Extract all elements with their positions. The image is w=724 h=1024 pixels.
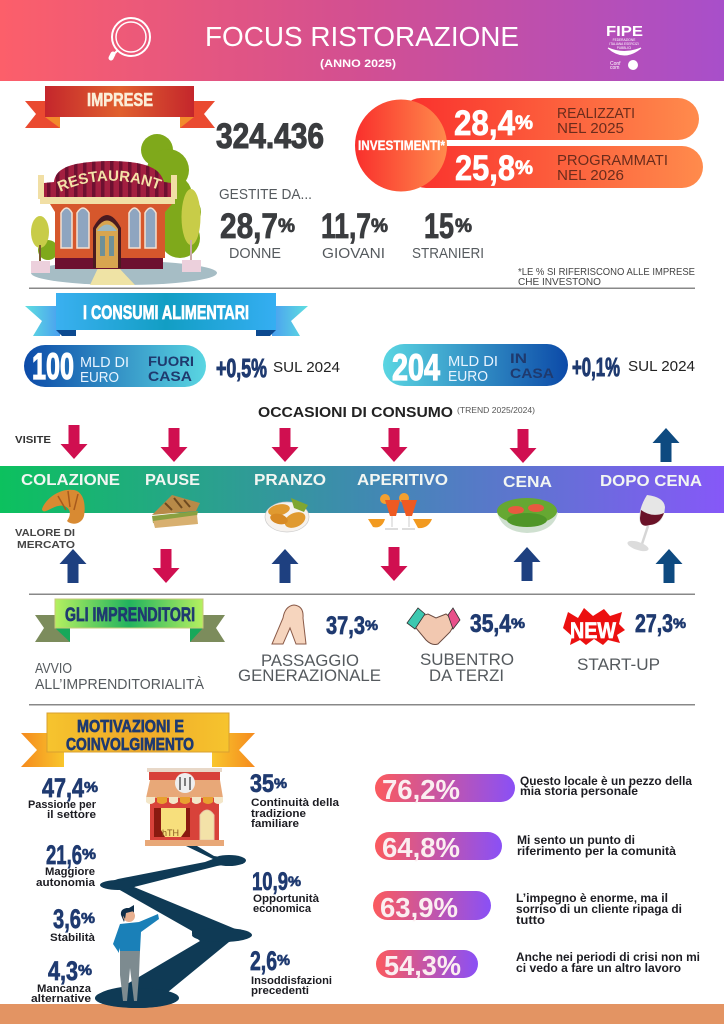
stat: continuita tradizione familiare: Continuità della	[251, 797, 340, 809]
statement: periodi di crisi	[376, 950, 700, 981]
stat: start-up: 27,3	[635, 610, 673, 638]
band: meal occasions	[0, 466, 724, 513]
arrows: valore di mercato	[60, 547, 682, 583]
pill: programmati	[405, 146, 703, 188]
label: visite: VISITE	[15, 435, 51, 446]
stat: stabilita: 3,6	[53, 904, 81, 934]
stat: mancanza alternative: %	[78, 962, 92, 979]
stat: start-up: %	[673, 615, 687, 631]
pill: realizzati: %	[515, 113, 533, 134]
stat: subentro da terzi: 35,4	[470, 610, 511, 638]
stat: opportunita economica: economica	[253, 903, 312, 915]
stat: mancanza alternative: Mancanza	[37, 983, 92, 995]
heading: occasioni di consumo	[258, 405, 535, 421]
stat: donne: DONNE	[229, 245, 281, 262]
pill: 204 mld in casa	[383, 344, 568, 388]
stat: start-up: START-UP	[577, 655, 660, 674]
statement: impegno enorme: 63,9%	[380, 892, 458, 923]
stat: mancanza alternative	[31, 956, 92, 1005]
pill: 204 mld in casa: EURO	[448, 368, 488, 385]
pill: realizzati: REALIZZATI	[557, 106, 635, 122]
trend: +0,1%: SUL 2024	[628, 358, 695, 375]
trend: +0,5%	[216, 353, 340, 383]
icon: aperitivo glasses	[368, 493, 432, 529]
stat: stranieri: %	[455, 216, 472, 237]
stat: start-up	[563, 608, 687, 674]
statement: storia personale: mia storia personale	[520, 784, 638, 798]
subtitle: (ANNO 2025)	[320, 58, 396, 70]
stat: continuita tradizione familiare: 35	[250, 770, 274, 798]
arrows: visite	[60, 425, 680, 463]
pill: programmati: NEL 2026	[557, 168, 624, 184]
stat: insoddisfazioni precedenti: Insoddisfazioni	[251, 975, 332, 987]
band: meal occasions: COLAZIONE	[21, 472, 120, 489]
stat: opportunita economica	[252, 868, 320, 915]
stat: continuita tradizione familiare: tradizione	[251, 808, 306, 820]
stat: subentro da terzi	[407, 608, 526, 685]
text: gestite da: GESTITE DA...	[219, 186, 312, 203]
statement: storia personale: Questo locale è un pezzo della	[520, 774, 692, 788]
stat: passione per il settore	[28, 773, 98, 821]
stat: giovani: GIOVANI	[322, 245, 385, 262]
stat: passaggio generazionale	[238, 605, 381, 685]
stat: stranieri: STRANIERI	[412, 245, 484, 262]
stat: opportunita economica: 10,9	[252, 868, 288, 896]
ribbon heading: gli imprenditori	[35, 599, 225, 642]
stat: continuita tradizione familiare: %	[274, 775, 288, 791]
statement: periodi di crisi: ci vedo a fare un altro lavoro	[516, 961, 681, 975]
statement: impegno enorme	[373, 891, 682, 927]
stat: giovani: 11,7	[321, 207, 371, 246]
pill: programmati: 25,8	[455, 149, 515, 188]
band: meal occasions: PAUSE	[145, 472, 200, 489]
logo: FIPE: FIPE	[606, 23, 643, 40]
logo: FIPE: com	[610, 65, 619, 71]
text: avvio all'imprenditorialita: AVVIO	[35, 660, 72, 677]
band: meal occasions: CENA	[503, 474, 552, 491]
ribbon heading: motivazioni e coinvolgimento: COINVOLGIMENTO	[66, 734, 194, 754]
pill: 100 mld fuori casa: EURO	[80, 369, 119, 386]
statement: storia personale: 76,2%	[382, 774, 460, 805]
logo: FIPE: PUBBLICI	[617, 46, 631, 50]
stat: maggiore autonomia: autonomia	[36, 877, 96, 889]
icon: new burst: NEW	[570, 618, 616, 643]
label: valore di mercato: VALORE DI	[15, 528, 75, 539]
stat: passione per il settore: %	[84, 779, 98, 796]
footer band	[0, 1004, 724, 1024]
footnote: CHE INVESTONO	[518, 276, 601, 288]
label: valore di mercato: MERCATO	[17, 540, 75, 551]
stat: subentro da terzi: %	[511, 615, 526, 631]
pill: 100 mld fuori casa: 100	[32, 346, 74, 387]
trend: +0,1%: +0,1%	[572, 352, 620, 382]
illustration: shop	[145, 768, 224, 846]
ribbon heading: i consumi alimentari	[25, 293, 308, 336]
stat: mancanza alternative: alternative	[31, 993, 91, 1005]
icon: handshake	[407, 608, 460, 644]
statement: punto di riferimento: 64,8%	[382, 832, 460, 863]
pill: programmati: %	[515, 158, 533, 179]
circle: investimenti label	[355, 100, 447, 192]
heading: occasioni di consumo: OCCASIONI DI CONSUMO	[258, 405, 453, 421]
heading: occasioni di consumo: (TREND 2025/2024)	[457, 406, 535, 415]
stat: insoddisfazioni precedenti: %	[277, 952, 290, 969]
stat: continuita tradizione familiare	[250, 770, 340, 830]
ribbon heading: i consumi alimentari: I CONSUMI ALIMENTARI	[83, 303, 249, 324]
stat: stabilita: %	[81, 910, 95, 927]
ribbon heading: imprese	[25, 86, 215, 128]
stat: stranieri	[412, 207, 484, 262]
icon: croissant	[42, 490, 85, 524]
illustration: restaurant: RESTAURANT	[57, 170, 162, 192]
pill: 204 mld in casa: CASA	[510, 365, 554, 381]
stat: passaggio generazionale: %	[365, 617, 379, 633]
label: valore di mercato	[15, 528, 75, 551]
logo: FIPE: FEDERAZIONE	[613, 38, 635, 42]
header band	[0, 0, 724, 81]
pill: 204 mld in casa: 204	[392, 347, 440, 388]
icon: clasped arms	[272, 605, 306, 644]
pill: programmati: PROGRAMMATI	[557, 153, 668, 169]
stat: opportunita economica: %	[288, 873, 302, 889]
statement: impegno enorme: sorriso di un cliente ripaga di	[516, 902, 682, 916]
circle: investimenti label: INVESTIMENTI*	[358, 137, 445, 153]
stat: mancanza alternative: 4,3	[48, 956, 78, 986]
stat: passaggio generazionale: GENERAZIONALE	[238, 666, 381, 685]
stat: passaggio generazionale: PASSAGGIO	[261, 651, 359, 670]
footnote	[518, 266, 695, 288]
statement: punto di riferimento: Mi sento un punto di	[517, 833, 635, 847]
band: meal occasions: DOPO CENA	[600, 473, 702, 490]
trend: +0,5%: SUL 2024	[273, 359, 340, 376]
pill: 100 mld fuori casa: FUORI	[148, 353, 194, 369]
stat: stabilita	[50, 904, 96, 944]
statement: punto di riferimento	[375, 832, 676, 863]
band: meal occasions: PRANZO	[254, 472, 326, 489]
stat: passione per il settore: 47,4	[42, 773, 84, 803]
stat: donne: 28,7	[220, 207, 278, 246]
stat: insoddisfazioni precedenti: 2,6	[250, 946, 277, 976]
stat: maggiore autonomia: %	[82, 846, 96, 863]
stat: stabilita: Stabilità	[50, 932, 96, 944]
stat: subentro da terzi: DA TERZI	[429, 666, 504, 685]
stat: maggiore autonomia: 21,6	[46, 840, 82, 870]
trend: +0,5%: +0,5%	[216, 353, 267, 383]
stat: passione per il settore: il settore	[47, 809, 96, 821]
stat: maggiore autonomia: Maggiore	[45, 866, 95, 878]
illustration: man	[113, 905, 159, 1001]
illustration: restaurant	[31, 134, 217, 285]
illustration: winding road	[95, 846, 252, 1008]
icon: wine glass	[626, 495, 665, 553]
pill: realizzati	[400, 98, 699, 143]
stat: maggiore autonomia	[36, 840, 96, 889]
stat: insoddisfazioni precedenti: precedenti	[251, 985, 309, 997]
icon: plate of cutlets	[265, 498, 309, 532]
statement: periodi di crisi: 54,3%	[384, 950, 461, 981]
ribbon heading: motivazioni e coinvolgimento: MOTIVAZIONI E	[77, 716, 184, 736]
stat: passione per il settore: Passione per	[28, 799, 97, 811]
pill: realizzati: NEL 2025	[557, 121, 624, 137]
icon: magnifying glass	[111, 18, 150, 58]
footnote: *LE % SI RIFERISCONO ALLE IMPRESE	[518, 266, 695, 278]
stat: stranieri: 15	[424, 207, 454, 246]
stat: subentro da terzi: SUBENTRO	[420, 650, 514, 669]
stat: opportunita economica: Opportunità	[253, 893, 320, 905]
icon: salad bowl	[497, 498, 558, 533]
ribbon heading: motivazioni e coinvolgimento	[21, 713, 255, 767]
stat: donne	[220, 207, 295, 262]
stat: donne: %	[278, 216, 295, 237]
text: avvio all'imprenditorialita	[35, 660, 204, 693]
title: FOCUS RISTORAZIONE	[205, 21, 519, 52]
stat: continuita tradizione familiare: familiare	[251, 818, 299, 830]
ribbon heading: imprese: IMPRESE	[87, 90, 153, 110]
stat: giovani	[321, 207, 388, 262]
statement: storia personale	[375, 774, 692, 805]
logo: FIPE: ITALIANA ESERCIZI	[609, 42, 639, 46]
statement: periodi di crisi: Anche nei periodi di crisi non mi	[516, 950, 700, 964]
stat: passaggio generazionale: 37,3	[326, 612, 365, 640]
illustration: shop: hTH	[162, 828, 179, 838]
pill: 100 mld fuori casa: CASA	[148, 368, 192, 384]
statement: impegno enorme: tutto	[516, 913, 545, 927]
logo: FIPE	[606, 23, 643, 71]
stat: insoddisfazioni precedenti	[250, 946, 332, 997]
total enterprises number: 324.436	[216, 117, 324, 156]
statement: punto di riferimento: riferimento per la comunità	[517, 844, 676, 858]
block: investimenti	[355, 98, 703, 192]
trend: +0,1%	[572, 352, 695, 382]
pill: 204 mld in casa: MLD DI	[448, 353, 498, 370]
stat: giovani: %	[371, 216, 388, 237]
logo: FIPE: Conf	[610, 61, 621, 67]
ribbon heading: gli imprenditori: GLI IMPRENDITORI	[65, 605, 195, 626]
statement: impegno enorme: L’impegno è enorme, ma il	[516, 891, 668, 905]
pill: realizzati: 28,4	[454, 104, 515, 143]
text: avvio all'imprenditorialita: ALL’IMPRENDITORIALITÀ	[35, 676, 204, 693]
pill: 100 mld fuori casa	[24, 345, 206, 387]
pill: 100 mld fuori casa: MLD DI	[80, 354, 129, 371]
band: meal occasions: APERITIVO	[357, 472, 448, 489]
pill: 204 mld in casa: IN	[510, 350, 527, 366]
icon: sandwich	[152, 495, 200, 528]
